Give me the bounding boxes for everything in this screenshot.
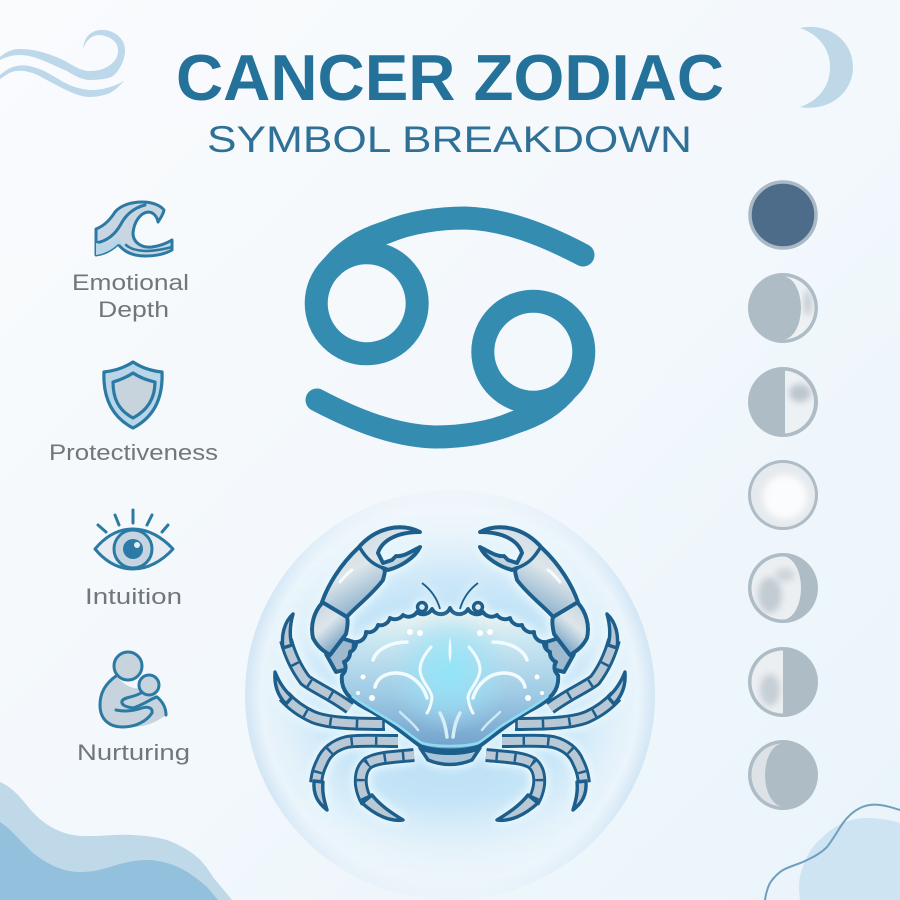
- decorative wave top left: [0, 30, 125, 97]
- decorative crescent moon top right: [800, 27, 853, 108]
- leg one: [282, 614, 350, 708]
- upper arm: [312, 603, 348, 655]
- eye stalk: [418, 602, 426, 612]
- shell center glow: [388, 610, 512, 734]
- label: Intuition: [85, 584, 182, 609]
- icon: parent and child: [100, 652, 166, 727]
- shell ridges left: [356, 629, 447, 737]
- lower plate: [420, 748, 480, 764]
- crab halo: [245, 490, 655, 900]
- leg two: [275, 672, 385, 724]
- shell ridges right: [453, 629, 544, 737]
- crab shell: [342, 608, 558, 750]
- icon: wave: [96, 202, 172, 256]
- trait: protectiveness: [49, 362, 218, 465]
- decorative shape bottom right: [765, 805, 900, 900]
- phase: full moon: [748, 460, 818, 530]
- icon: shield: [104, 362, 162, 428]
- antenna: [422, 583, 440, 609]
- decorative wave bottom left: [0, 782, 232, 900]
- title: CANCER ZODIAC: [176, 41, 724, 114]
- label: Protectiveness: [49, 440, 218, 465]
- crab right limbs: [460, 527, 625, 820]
- claw: [322, 527, 420, 617]
- crab left limbs: [275, 527, 440, 820]
- moon phases column: [748, 182, 820, 814]
- icon: eye: [95, 510, 173, 569]
- cancer glyph symbol: [316, 218, 584, 437]
- center ridge: [448, 637, 452, 663]
- phase: new moon: [750, 182, 816, 248]
- trait: emotional depth: [72, 202, 189, 322]
- label: Emotional: [72, 270, 189, 295]
- label line two: Depth: [98, 297, 169, 322]
- claw highlight: [340, 570, 352, 582]
- subtitle: SYMBOL BREAKDOWN: [207, 119, 692, 160]
- phase: waning gibbous: [748, 550, 818, 626]
- trait: nurturing: [77, 652, 190, 765]
- leg four: [361, 755, 414, 820]
- trait: intuition: [85, 510, 182, 609]
- crab illustration: [275, 527, 625, 820]
- phase: first quarter: [748, 367, 818, 437]
- phase: last quarter: [748, 645, 818, 721]
- phase: waning crescent: [748, 738, 818, 814]
- label: Nurturing: [77, 740, 190, 765]
- forearm: [326, 638, 354, 672]
- leg three: [314, 741, 398, 810]
- phase: waxing crescent: [748, 273, 818, 343]
- claw joint: [360, 548, 383, 568]
- shell rim light: [352, 696, 548, 746]
